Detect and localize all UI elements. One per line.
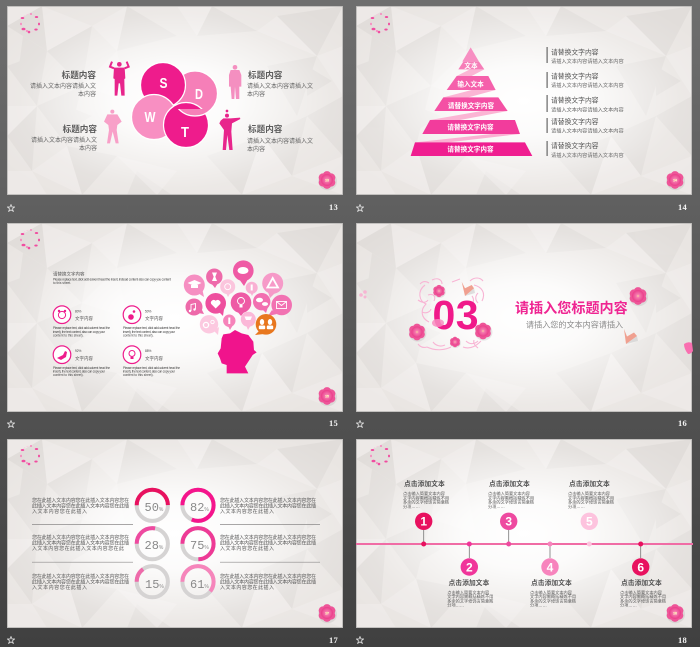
- text list: 请插入文本内容请插入文本内容: [551, 126, 624, 134]
- icon: person presenting: [219, 110, 240, 150]
- text list: 请插入文本内容请插入文本内容: [551, 151, 624, 159]
- milestone 1: [403, 479, 449, 546]
- item: bulb: Please replace text, click add-solvent head the: [123, 366, 180, 370]
- milestone 3: 文字内容需概括精炼不用: [488, 494, 534, 502]
- item: rocking horse: [53, 346, 110, 377]
- milestone 6: 点击输入简要文本内容: [620, 589, 662, 596]
- milestone 5: 5: [586, 514, 593, 528]
- milestone 6: [620, 542, 666, 608]
- panel: slide 13 SWOT: [7, 6, 343, 212]
- tier label: 请替换文字内容: [447, 122, 494, 132]
- chart: pyramid: [411, 47, 532, 156]
- icon: person hands on hips: [104, 110, 122, 143]
- text list: 请插入文本内容请插入文本内容: [551, 106, 624, 114]
- text block: top left: 请插入文本内容请插入文: [30, 82, 96, 90]
- milestone 3: [488, 479, 534, 546]
- icon: flower: [475, 323, 492, 341]
- page number: 15: [329, 418, 338, 428]
- chart: SWOT pinwheel: [132, 62, 218, 148]
- milestone 2: 点击输入简要文本内容: [447, 589, 489, 596]
- icon: corner flower: [318, 387, 337, 406]
- text block: right 2: 此插入文本内容您在此插入文本内容您在此插: [220, 540, 316, 546]
- icon: corner flower: 17: [325, 612, 329, 616]
- item: runner: 文字内容: [145, 315, 163, 322]
- milestone 4: 点击添加文本: [531, 578, 572, 587]
- label: T: T: [181, 124, 189, 141]
- text block: left 1: 您在此插入文本内容您在此插入文本内容您在: [32, 497, 129, 504]
- icon: corner flower: [318, 604, 337, 623]
- value: 28%: 28%: [144, 539, 164, 553]
- text block: left 2: 此插入文本内容您在此插入文本内容您在此插: [32, 540, 129, 546]
- text list: 请替换文字内容: [551, 48, 599, 56]
- text block: right 3: 入文本内容您在此插入: [220, 584, 274, 591]
- text block: bottom left: 本内容: [79, 144, 97, 152]
- tier label: 文本: [464, 61, 478, 70]
- milestone 5: 分项……: [568, 503, 585, 510]
- item: bulb: [123, 346, 180, 377]
- milestone 4: 文字内容需概括精炼不用: [530, 593, 576, 600]
- icon: star: [356, 420, 364, 427]
- icon: small petals: [359, 290, 367, 298]
- icon: flower: [450, 337, 461, 348]
- milestone 6: 点击添加文本: [621, 578, 662, 587]
- item: rocking horse: 92%: [75, 349, 82, 353]
- heading: top left: 标题内容: [62, 69, 96, 80]
- panel: slide 16 section title: [356, 223, 693, 428]
- milestone 1: 多余的文字修饰言简意赅: [403, 498, 449, 506]
- text block: right 1: 入文本内容您在此插入: [220, 508, 274, 515]
- milestone 2: 多余的文字修饰言简意赅: [447, 597, 493, 604]
- icon: wreath: [370, 13, 390, 33]
- item: runner: [123, 306, 180, 338]
- icon: star: [7, 420, 15, 427]
- milestone 4: 分项……: [530, 602, 547, 608]
- item: runner: content to this sheet).: [123, 334, 154, 338]
- icon: petal: [432, 319, 444, 327]
- item: rocking horse: content to this sheet).: [53, 373, 84, 377]
- heading: top right: 标题内容: [248, 69, 283, 80]
- chart: ring 15%: [137, 566, 168, 597]
- item: alarm: insert), the text content, also can copy your: [53, 330, 106, 334]
- page number: 13: [329, 202, 338, 212]
- value: 15%: 15%: [145, 578, 164, 592]
- text block: intro: to this sheet.: [53, 281, 71, 285]
- icon: corner flower: 15: [325, 395, 330, 399]
- text block: left 2: 入文本内容您在此插入文本内容您在此: [32, 545, 124, 552]
- subtitle: 请插入您的文本内容请插入: [526, 320, 623, 330]
- item: alarm: 文字内容: [75, 315, 93, 322]
- label: S: S: [160, 75, 168, 92]
- title: 请插入您标题内容: [515, 300, 628, 316]
- icon: corner flower: 18: [673, 612, 677, 616]
- chart: ring 50%: [137, 490, 168, 521]
- milestone 4: 点击输入简要文本内容: [530, 589, 572, 596]
- heading: bottom right: 标题内容: [248, 123, 283, 134]
- text block: left 3: 此插入文本内容您在此插入文本内容您在此插: [32, 578, 129, 586]
- value: 50%: 50%: [144, 501, 164, 515]
- milestone 3: 点击输入简要文本内容: [488, 490, 530, 497]
- timeline axis: [356, 543, 693, 545]
- text block: left 2: 您在此插入文本内容您在此插入文本内容您在: [32, 534, 129, 541]
- milestone 5: [568, 479, 614, 546]
- label: D: D: [195, 86, 203, 103]
- chart: thought bubbles: [184, 260, 292, 335]
- item: rocking horse: 文字内容: [75, 355, 93, 362]
- text list: 请替换文字内容: [551, 141, 599, 150]
- text list: 请插入文本内容请插入文本内容: [551, 57, 624, 65]
- icon: flower: [433, 285, 446, 298]
- item: bulb: 88%: [145, 349, 152, 353]
- item: bulb: insert), the text content, also can copy your: [123, 370, 176, 374]
- icon: heart chevron: [462, 282, 475, 296]
- tier label: 输入文本: [457, 80, 484, 88]
- heading: 请替换文字内容: [53, 270, 85, 278]
- item: runner: 50%: [145, 310, 152, 314]
- text block: left 3: 您在此插入文本内容您在此插入文本内容您在: [32, 573, 129, 580]
- panel: slide 15 icons and head: [7, 223, 343, 428]
- floral frame: [418, 278, 484, 350]
- value: 75%: 75%: [190, 539, 209, 553]
- milestone 2: 2: [466, 560, 473, 574]
- milestone 1: 点击添加文本: [404, 479, 445, 488]
- milestone 1: 文字内容需概括精炼不用: [403, 494, 449, 502]
- page number: 16: [678, 418, 687, 428]
- item: bulb: content to this sheet).: [123, 373, 154, 377]
- milestone 5: 点击输入简要文本内容: [568, 490, 610, 497]
- milestone 6: 多余的文字修饰言简意赅: [620, 597, 666, 604]
- text list: 请替换文字内容: [551, 72, 599, 80]
- icon: corner flower: [666, 171, 685, 190]
- milestone 6: 分项……: [620, 602, 637, 608]
- panel: slide 17 rings: [7, 439, 343, 645]
- icon: flower: [629, 287, 648, 306]
- item: runner: Please replace text, click add-solvent head the: [123, 326, 180, 330]
- text block: bottom right: 请插入文本内容请插入文: [247, 137, 313, 145]
- item: alarm: [53, 306, 110, 338]
- page number: 18: [678, 635, 687, 645]
- text block: right 1: 此插入文本内容您在此插入文本内容您在此插: [220, 502, 316, 510]
- panel: slide 14 pyramid: [356, 6, 692, 212]
- text list: 请替换文字内容: [551, 117, 599, 126]
- chart: ring 28%: [137, 528, 168, 559]
- page number: 17: [329, 635, 339, 645]
- milestone 4: 多余的文字修饰言简意赅: [530, 597, 576, 604]
- number: 03: 03: [432, 292, 479, 338]
- text block: top right: 请插入文本内容请插入文: [247, 82, 313, 90]
- milestone 5: 文字内容需概括精炼不用: [568, 494, 614, 502]
- heading: bottom left: 标题内容: [63, 123, 97, 134]
- item: bulb: 文字内容: [145, 355, 163, 362]
- text block: right 2: 您在此插入文本内容您在此插入文本内容您在: [220, 534, 316, 541]
- item: runner: insert), the text content, also can copy your: [123, 330, 176, 334]
- panel: slide 18 timeline: [356, 439, 693, 645]
- text block: left 1: 入文本内容您在此插入: [32, 508, 87, 515]
- icon: wreath: [20, 13, 40, 33]
- text block: right 1: 您在此插入文本内容您在此插入文本内容您在: [220, 497, 316, 504]
- text block: top left: 本内容: [78, 90, 96, 98]
- milestone 1: 分项……: [403, 503, 420, 510]
- milestone 3: 点击添加文本: [489, 479, 530, 488]
- icon: corner flower: [318, 171, 337, 190]
- milestone 2: 分项……: [447, 602, 464, 608]
- text list: [546, 47, 624, 159]
- milestone 3: 多余的文字修饰言简意赅: [488, 498, 534, 506]
- icon: person standing: [229, 65, 241, 99]
- milestone 4: [530, 542, 576, 608]
- item: alarm: Please replace text, click add-solvent head the: [53, 326, 110, 330]
- tier label: 请替换文字内容: [447, 144, 494, 154]
- icon: corner flower: 13: [325, 179, 329, 183]
- text block: right 3: 您在此插入文本内容您在此插入文本内容您在: [220, 573, 316, 580]
- icon: wreath: [20, 445, 40, 465]
- value: 82%: 82%: [190, 501, 209, 515]
- text block: bottom left: 请插入文本内容请插入文: [31, 136, 97, 144]
- text list: 请替换文字内容: [551, 96, 599, 104]
- icon: heart chevron: [624, 329, 638, 344]
- item: alarm: 80%: [75, 310, 82, 314]
- text block: left 3: 入文本内容您在此插入: [32, 584, 87, 591]
- chart: ring 75%: [182, 528, 214, 559]
- icon: corner flower: 14: [673, 179, 678, 183]
- item: alarm: content to this sheet).: [53, 334, 84, 338]
- text block: bottom right: 本内容: [247, 145, 265, 153]
- milestone 6: 6: [637, 560, 644, 574]
- item: rocking horse: Please replace text, click add-solvent head the: [53, 366, 110, 370]
- value: 61%: 61%: [190, 578, 209, 592]
- milestone 3: 分项……: [488, 503, 505, 510]
- text list: 请插入文本内容请插入文本内容: [551, 81, 624, 89]
- icon: person flexing: [110, 62, 129, 96]
- icon: flower: [409, 324, 426, 342]
- tier label: 请替换文字内容: [448, 101, 494, 110]
- text block: top right: 本内容: [247, 90, 265, 98]
- icon: petal: [684, 342, 693, 354]
- text block: left 1: 此插入文本内容您在此插入文本内容您在此插: [32, 502, 129, 510]
- milestone 6: 文字内容需概括精炼不用: [620, 593, 666, 600]
- milestone 4: 4: [547, 560, 554, 574]
- chart: ring 82%: [182, 490, 214, 521]
- icon: star: [7, 636, 15, 643]
- milestone 5: 点击添加文本: [569, 479, 610, 488]
- milestone 5: 多余的文字修饰言简意赅: [568, 498, 614, 506]
- icon: wreath: [370, 445, 390, 465]
- milestone 1: 点击输入简要文本内容: [403, 490, 445, 497]
- icon: corner flower: [666, 604, 685, 623]
- item: rocking horse: insert), the text content, also can copy your: [53, 370, 106, 374]
- milestone 1: 1: [420, 514, 427, 528]
- milestone 2: 文字内容需概括精炼不用: [447, 593, 493, 600]
- icon: star: [356, 636, 364, 643]
- text block: right 2: 入文本内容您在此插入: [220, 545, 274, 552]
- milestone 3: 3: [505, 514, 512, 528]
- icon: head silhouette: [218, 330, 257, 373]
- icon: star: [356, 204, 364, 211]
- milestone 2: [447, 542, 493, 608]
- label: W: W: [144, 109, 156, 126]
- chart: ring 61%: [182, 566, 214, 597]
- text block: right 3: 此插入文本内容您在此插入文本内容您在此插: [220, 578, 316, 586]
- icon: star: [7, 204, 15, 211]
- text block: intro: Please replace text, click add-solvent head the insert, Instead content also can copy you content: [53, 278, 171, 282]
- milestone 2: 点击添加文本: [448, 578, 489, 587]
- icon: wreath: [20, 229, 40, 249]
- page number: 14: [678, 202, 688, 212]
